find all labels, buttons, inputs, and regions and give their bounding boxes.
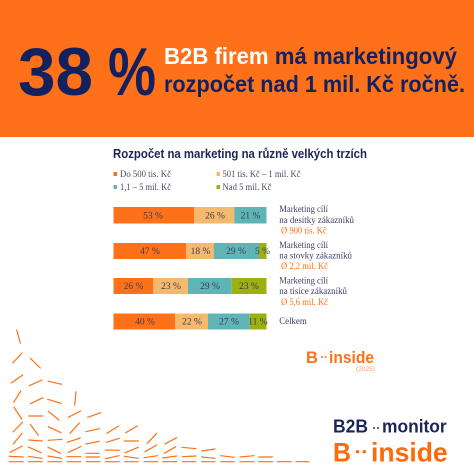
legend: 501 tis. Kč – 1 mil. Kč	[222, 169, 300, 179]
stacked bar: tisíce zákazníků	[114, 278, 266, 294]
stacked bar: stovky zákazníků: 47 %	[140, 247, 160, 257]
stacked bar: desítky zákazníků: 53 %	[143, 212, 163, 222]
stacked bar: tisíce zákazníků: 29 %	[200, 282, 220, 292]
label: tisíce zákazníků: Marketing cílí	[279, 276, 328, 286]
headline text: rozpočet nad 1 mil. Kč ročně.	[164, 71, 465, 97]
big number: 38 %: %	[108, 34, 156, 110]
stacked bar: stovky zákazníků	[114, 243, 270, 259]
logo: B··inside (2025): (2025)	[356, 367, 375, 373]
stacked bar: tisíce zákazníků: 23 %	[161, 282, 181, 292]
stacked bar: tisíce zákazníků: 26 %	[124, 282, 143, 292]
label: stovky zákazníků: na stovky zákazníků	[279, 250, 352, 262]
legend: Nad 5 mil. Kč	[222, 182, 272, 192]
label: tisíce zákazníků: Ø 5,6 mil. Kč	[281, 298, 328, 308]
headline text: B2B firem má marketingový	[164, 43, 457, 69]
decorative arrows field	[9, 330, 309, 462]
legend	[114, 169, 300, 192]
logo: B2B··monitor: monitor	[382, 416, 447, 437]
stacked bar: celkem: 22 %	[182, 318, 202, 328]
logo: B··inside (2025)	[306, 349, 375, 373]
stacked bar: celkem	[114, 314, 268, 330]
stacked bar: desítky zákazníků	[114, 207, 266, 224]
stacked bar: stovky zákazníků: 5 %	[255, 247, 270, 257]
logo: B2B··monitor	[333, 416, 447, 437]
legend: 1,1 – 5 mil. Kč	[120, 182, 171, 192]
headline text	[164, 43, 465, 97]
logo: B··inside (2025): inside	[329, 349, 374, 367]
stacked bar: desítky zákazníků: 26 %	[205, 212, 225, 222]
label: stovky zákazníků	[279, 241, 352, 272]
chart title: Rozpočet na marketing na různě velkých trzích	[113, 146, 367, 161]
stacked bar: tisíce zákazníků: 23 %	[239, 282, 259, 292]
big number: 38 %: 38	[18, 34, 93, 110]
logo: B··inside: B	[333, 438, 351, 468]
stacked bar: stovky zákazníků: 29 %	[226, 247, 246, 257]
stacked bar: celkem: 11 %	[248, 318, 268, 328]
legend: Do 500 tis. Kč	[120, 169, 171, 179]
label: stovky zákazníků: Marketing cílí	[279, 241, 328, 251]
stacked bar: stovky zákazníků: 18 %	[191, 247, 210, 257]
panel: orange header	[0, 0, 474, 137]
label: desítky zákazníků: na desítky zákazníků	[279, 215, 354, 226]
label: desítky zákazníků: Marketing cílí	[279, 205, 328, 215]
label: stovky zákazníků: Ø 2,2 mil. Kč	[281, 262, 328, 272]
stacked bar: celkem: 40 %	[135, 318, 155, 328]
label: tisíce zákazníků	[279, 276, 347, 308]
label: tisíce zákazníků: na tisíce zákazníků	[279, 286, 347, 297]
stacked bar: celkem: 27 %	[219, 318, 239, 328]
logo: B··inside: inside	[371, 438, 448, 468]
logo: B··inside	[333, 438, 448, 468]
logo: B··inside (2025): B	[306, 349, 318, 367]
logo: B2B··monitor: B2B	[333, 416, 368, 437]
label: celkem: Celkem	[279, 317, 307, 327]
stacked bar: desítky zákazníků: 21 %	[241, 212, 260, 222]
label: desítky zákazníků: Ø 900 tis. Kč	[281, 226, 327, 236]
big number: 38 %	[18, 34, 156, 110]
label: desítky zákazníků	[279, 205, 354, 236]
